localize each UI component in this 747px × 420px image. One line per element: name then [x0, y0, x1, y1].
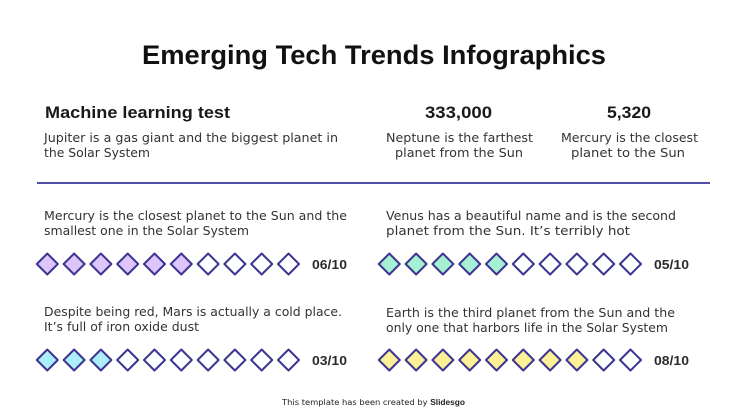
panel: Mercury rating	[37, 209, 347, 274]
footer credit: This template has been created by Slidesgo	[281, 398, 465, 407]
stat: 333,000	[386, 103, 533, 160]
score: 06/10: 06/10	[312, 257, 347, 272]
text: Earth description: Earth is the third planet from the Sun and the	[386, 306, 675, 320]
text: Earth description: only one that harbors life in the Solar System	[386, 321, 668, 335]
panel: Earth rating	[379, 306, 689, 370]
text: Jupiter description	[43, 131, 338, 160]
heading: machine learning test: Machine learning test	[45, 103, 230, 122]
text: Venus description: planet from the Sun. It’s terribly hot	[386, 224, 630, 238]
stat: 5,320: Mercury is the closest	[561, 131, 698, 145]
text: Jupiter description: the Solar System	[44, 146, 150, 160]
panel: Mars rating	[37, 305, 347, 370]
rating diamonds: 5 of 10	[379, 254, 641, 274]
stat: 5,320: planet to the Sun	[571, 146, 685, 160]
rating diamonds: 3 of 10	[37, 350, 299, 370]
divider line	[37, 182, 710, 184]
text: Mars description: Despite being red, Mars is actually a cold place.	[44, 305, 342, 319]
panel: machine learning test	[43, 103, 338, 160]
text: Venus description: Venus has a beautiful name and is the second	[386, 209, 676, 223]
stat: 333,000: planet from the Sun	[395, 146, 523, 160]
panel: Venus rating	[379, 209, 689, 274]
stat: 333,000: Neptune is the farthest	[386, 131, 533, 145]
text: Mars description	[44, 305, 342, 334]
text: Mercury description	[44, 209, 347, 238]
stat: 333,000: 333,000	[425, 103, 492, 122]
text: Mercury description: smallest one in the Solar System	[44, 224, 249, 238]
text: Earth description	[386, 306, 675, 335]
rating diamonds: 8 of 10	[379, 350, 641, 370]
stat: 5,320	[561, 103, 698, 160]
title: Emerging Tech Trends Infographics	[142, 40, 606, 70]
rating diamonds: 6 of 10	[37, 254, 299, 274]
text: Jupiter description: Jupiter is a gas giant and the biggest planet in	[43, 131, 338, 145]
text: Mercury description: Mercury is the closest planet to the Sun and the	[44, 209, 347, 223]
text: Venus description	[386, 209, 676, 238]
score: 08/10: 08/10	[654, 353, 689, 368]
stat: 5,320: 5,320	[607, 103, 651, 122]
text: Mars description: It’s full of iron oxide dust	[44, 320, 199, 334]
score: 05/10: 05/10	[654, 257, 689, 272]
score: 03/10: 03/10	[312, 353, 347, 368]
